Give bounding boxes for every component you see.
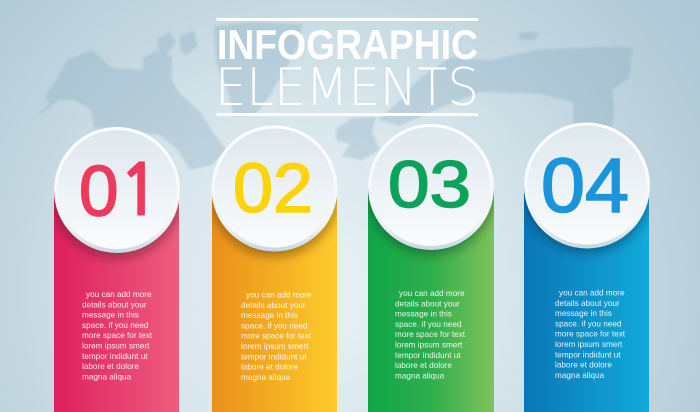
number 03: 03 — [388, 147, 471, 221]
text 3: tempor indidunt ut — [395, 351, 461, 360]
text 4: lorem ipsum smert — [555, 340, 623, 349]
badge 01 — [54, 127, 180, 253]
text 4: message in this — [555, 309, 612, 318]
text 2: more space for text — [241, 332, 312, 341]
text 1: tempor indidunt ut — [82, 352, 148, 361]
badge 03 — [368, 124, 494, 250]
text 1: details about your — [82, 300, 147, 309]
text 4: tempor indidunt ut — [555, 350, 621, 359]
text 4: magna aliqua — [555, 371, 605, 380]
title line 1: INFOGRAPHIC — [217, 21, 478, 68]
text 2: labore et dolore — [241, 363, 298, 372]
text 2: you can add more — [246, 290, 312, 300]
text 3: details about your — [395, 299, 460, 308]
text 3: more space for text — [395, 330, 466, 339]
badge 04 — [524, 122, 650, 248]
number 04: 04 — [541, 143, 629, 229]
text 1: labore et dolore — [82, 362, 139, 371]
number 01: 1 — [118, 156, 161, 226]
panel 2 — [212, 196, 337, 412]
text 4: labore et dolore — [555, 361, 612, 370]
text 1: lorem ipsum smert — [82, 342, 150, 350]
number 01: 0 — [79, 152, 118, 232]
number 02: 02 — [233, 149, 313, 227]
text 3: labore et dolore — [395, 361, 452, 370]
text 2: magna aliqua — [241, 373, 291, 382]
panel 4 — [524, 186, 649, 412]
badge 02 — [212, 126, 338, 252]
text 1: you can add more — [86, 290, 152, 299]
text 1: more space for text — [82, 331, 153, 340]
text 4: you can add more — [559, 288, 625, 298]
title line 2: ELEMENTS — [215, 58, 479, 118]
text 3: space. if you need — [395, 320, 462, 329]
text 4: space. if you need — [555, 319, 622, 328]
text 4: more space for text — [555, 330, 626, 339]
text 1: message in this — [82, 311, 139, 320]
text 1: space. if you need — [82, 321, 149, 330]
text 3: you can add more — [399, 289, 465, 298]
text 2: message in this — [241, 311, 298, 320]
text 1: magna aliqua — [82, 372, 132, 381]
text 2: details about your — [241, 301, 306, 310]
text 3: lorem ipsum smert — [395, 340, 463, 350]
panel 3 — [368, 188, 494, 412]
text 3: message in this — [395, 310, 452, 319]
title — [215, 18, 479, 118]
text 2: tempor indidunt ut — [241, 352, 307, 361]
panel 1 — [54, 190, 179, 412]
text 2: space. if you need — [241, 321, 308, 330]
world map — [33, 22, 632, 170]
text 4: details about your — [555, 299, 620, 308]
text 3: magna aliqua — [395, 371, 445, 380]
text 2: lorem ipsum smert — [241, 342, 309, 351]
